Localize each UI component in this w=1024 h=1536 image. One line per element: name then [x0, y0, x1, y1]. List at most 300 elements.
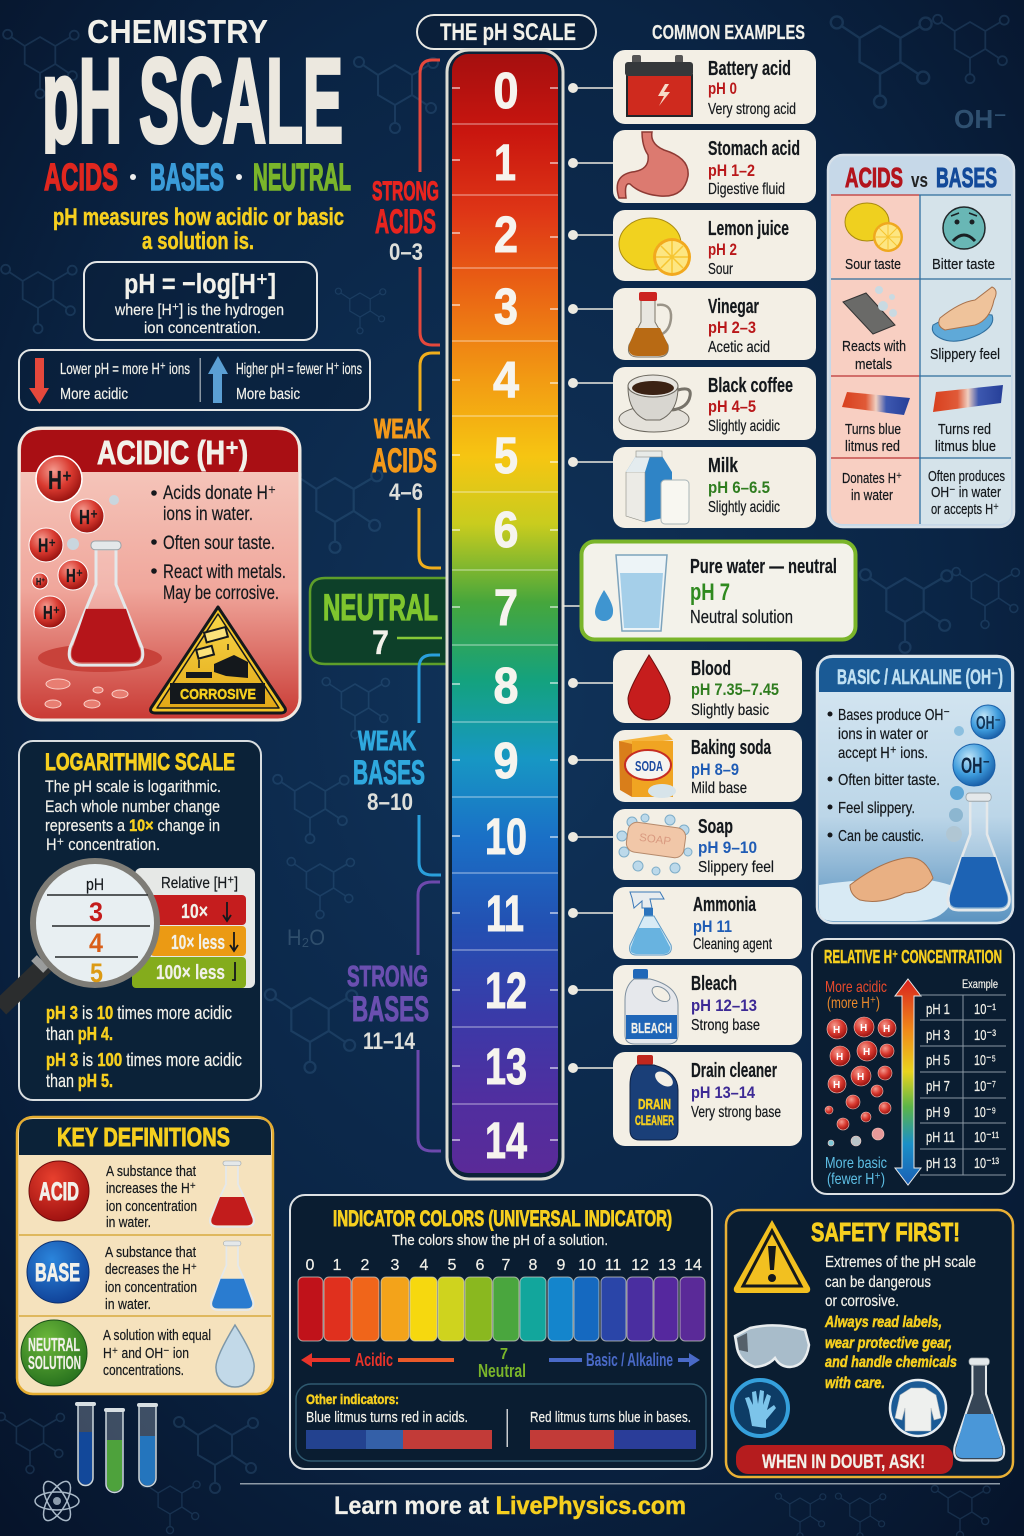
example card: stomach acid: pH 1–2 [708, 161, 755, 180]
log scale description: H⁺ concentration. [46, 835, 160, 854]
panel: indicator colors [290, 1195, 712, 1469]
icon: test tubes [75, 1402, 158, 1492]
scale header pill: THE pH SCALE [440, 19, 576, 46]
example card: battery acid: Very strong acid [708, 101, 796, 118]
label: strong bases: BASES [352, 990, 429, 1029]
band dividers and ticks [452, 88, 558, 1140]
icon: goggles [735, 1325, 809, 1367]
H+ ion bubbles: H⁺ [66, 566, 83, 586]
pH numbers: 9 [494, 732, 518, 789]
arrow: acidic: Acidic [355, 1350, 393, 1370]
arrow: basic alkaline [549, 1350, 700, 1370]
icon: drain cleaner jug: CLEANER [635, 1112, 674, 1128]
icon: hand in foam [850, 858, 933, 901]
heading: acids vs bases [845, 162, 997, 193]
panel: acidic: ACIDIC (H⁺) [97, 434, 248, 471]
definition: acid: increases the H⁺ [106, 1180, 196, 1197]
arrow: up blue [208, 356, 228, 403]
indicator numbers: 4 [420, 1257, 429, 1274]
example card: pure water: pH 7 [690, 579, 730, 606]
label: strong acids: STRONG [372, 176, 439, 206]
icon: battery [625, 55, 693, 116]
text: slippery feel: Slippery feel [930, 346, 1000, 363]
label: neutral 7: Neutral [478, 1361, 526, 1381]
basic bullet points [828, 707, 950, 845]
label: more basic: More basic [825, 1155, 887, 1172]
example card: blood: Blood [691, 658, 731, 680]
faint H2O label: H₂O [287, 925, 325, 950]
concentration table: Example [962, 977, 998, 991]
concentration table: pH 3 [926, 1027, 950, 1044]
bracket: weak acids [419, 353, 441, 568]
definition: base: BASE [35, 1259, 80, 1287]
text: donates H+: in water [851, 487, 893, 504]
panel: acidic [19, 428, 300, 720]
bracket: strong bases [418, 882, 441, 1151]
text: litmus right [935, 421, 996, 455]
panel: safety first [726, 1210, 1013, 1477]
panel: acids vs bases [828, 155, 1014, 527]
lower/higher pH box [19, 350, 370, 410]
icon: base flask [948, 793, 1010, 910]
label: weak acids: 4–6 [389, 479, 423, 506]
definition: acid: ion concentration [106, 1198, 197, 1215]
indicator numbers: 10 [578, 1257, 596, 1274]
example card: lemon juice: Sour [708, 261, 733, 278]
example card: black coffee [613, 367, 816, 440]
log scale comparisons: than pH 4. [46, 1024, 113, 1044]
acidic bullet points: May be corrosive. [163, 583, 279, 604]
example card: pure water: Pure water — neutral [690, 556, 837, 578]
icon: drain cleaner jug [630, 1055, 678, 1140]
icon: soap bar with bubbles: SOAP [638, 832, 672, 848]
heading: acids vs bases: vs [911, 170, 928, 192]
icon: bleach jug [625, 969, 678, 1044]
example card: lemon juice [613, 210, 816, 281]
example card: ammonia: Cleaning agent [693, 936, 772, 953]
icon: sad face [943, 207, 985, 249]
indicator numbers: 1 [333, 1257, 342, 1274]
indicator numbers: 2 [361, 1257, 370, 1274]
concentration table: pH 1 [926, 1001, 950, 1018]
H+ ion bubbles: H⁺ [43, 603, 60, 623]
formula box: pH = −log[H⁺] [124, 268, 276, 299]
example card: drain cleaner: Drain cleaner [691, 1060, 777, 1082]
panel: safety first: SAFETY FIRST! [811, 1217, 960, 1247]
pH numbers: 11 [486, 885, 524, 942]
label: strong bases: 11–14 [363, 1028, 416, 1055]
acidic bullet points: Acids donate H⁺ [163, 483, 276, 504]
example card: vinegar: Vinegar [708, 296, 759, 318]
callout: when in doubt: WHEN IN DOUBT, ASK! [762, 1452, 925, 1473]
label: more acidic: More acidic [825, 979, 887, 996]
example card: pure water: Neutral solution [690, 607, 793, 627]
litmus strip: red to blue [530, 1430, 696, 1449]
safety text: Extremes of the pH scale [825, 1254, 976, 1271]
concentration table [920, 977, 1006, 1175]
icon: coffee cup [619, 375, 690, 432]
definition: acid: A substance that [106, 1163, 197, 1180]
icon: warning triangle [735, 1222, 809, 1292]
acidic bullet points [151, 483, 286, 604]
example card: baking soda [613, 730, 802, 802]
other indicators box: Red litmus turns blue in bases. [530, 1409, 691, 1426]
label: neutral 7: 7 [500, 1346, 508, 1363]
definition: neutral solution: H⁺ and OH⁻ ion [103, 1345, 189, 1362]
label: more basic: (fewer H⁺) [827, 1171, 885, 1188]
log scale description [45, 777, 221, 854]
concentration table: pH 11 [926, 1129, 955, 1146]
pH numbers: 12 [485, 962, 527, 1019]
safety text: can be dangerous [825, 1274, 931, 1291]
log scale description: represents a 10× change in [45, 816, 220, 835]
H+ ion cloud: H [833, 1025, 840, 1036]
lower/higher pH box: Lower pH = more H⁺ ions [60, 361, 190, 378]
formula box [84, 262, 317, 340]
title [44, 20, 342, 154]
text: sour taste: Sour taste [845, 256, 901, 273]
H+ ion cloud: H [857, 1072, 864, 1083]
indicator numbers: 6 [476, 1257, 485, 1274]
OH- ion bubbles: OH⁻ [976, 713, 1001, 733]
basic bullet points: Often bitter taste. [838, 772, 940, 789]
icon: bleach jug: BLEACH [631, 1020, 672, 1037]
concentration table: pH 9 [926, 1104, 950, 1121]
log scale comparisons: pH 3 is 100 times more acidic [46, 1050, 242, 1070]
concentration table: 10⁻¹³ [974, 1155, 999, 1172]
safety text: wear protective gear, [825, 1335, 952, 1352]
indicator numbers [306, 1257, 702, 1274]
indicator numbers: 13 [658, 1257, 676, 1274]
icon: lemon small [845, 203, 903, 252]
example card: pure water [582, 542, 856, 640]
concentration table: 10⁻¹¹ [974, 1129, 999, 1146]
icon: corrosive warning triangle [151, 607, 285, 713]
pH numbers: 8 [494, 657, 518, 714]
H+ ion bubbles [29, 456, 119, 628]
H+ ion bubbles: H⁺ [48, 465, 72, 495]
indicator numbers: 11 [605, 1257, 621, 1274]
concentration table: 10⁻³ [974, 1027, 996, 1044]
indicator numbers: 0 [306, 1257, 315, 1274]
heading: acids vs bases: ACIDS [845, 162, 903, 193]
arrow: down red [29, 358, 49, 404]
litmus strip: blue to red [306, 1430, 492, 1449]
H+ ion cloud: H [883, 1024, 890, 1035]
panel: logarithmic scale [0, 741, 261, 1100]
log scale comparisons: pH 3 is 10 times more acidic [46, 1003, 232, 1023]
label: strong bases [347, 961, 429, 1055]
example card: milk: Slightly acidic [708, 499, 780, 516]
subtitle: acids bases neutral: ACIDS [44, 157, 118, 199]
example card: bleach: Strong base [691, 1017, 760, 1034]
indicator numbers: 5 [448, 1257, 457, 1274]
footer line [240, 1483, 1000, 1484]
other indicators box: Blue litmus turns red in acids. [306, 1409, 468, 1426]
H+ ion cloud: H [863, 1047, 870, 1058]
label: neutral 7 [478, 1346, 526, 1381]
log scale comparisons: than pH 5. [46, 1071, 113, 1091]
lower/higher pH box: More basic [236, 386, 300, 403]
example card: blood: Slightly basic [691, 702, 769, 719]
concentration table: 10⁻⁵ [974, 1052, 996, 1069]
callout: when in doubt [736, 1445, 953, 1474]
label: weak acids: ACIDS [372, 442, 437, 480]
title: pH scale: pH SCALE [42, 34, 343, 168]
definition: neutral solution: A solution with equal [103, 1327, 211, 1344]
example card: battery acid: Battery acid [708, 58, 791, 80]
icon: soap bar with bubbles [617, 814, 692, 875]
title: chemistry: CHEMISTRY [87, 13, 268, 50]
text: litmus left: Turns blue [845, 421, 901, 438]
neutral label box: 7 [372, 624, 389, 662]
icon: corrosive warning triangle: CORROSIVE [180, 686, 256, 703]
bracket: strong acids [420, 60, 440, 345]
common examples heading: COMMON EXAMPLES [652, 22, 805, 44]
icon: spray bottle [630, 892, 671, 955]
label: more basic [825, 1155, 887, 1188]
pH numbers: 10 [485, 808, 527, 865]
example card: ammonia [613, 887, 802, 959]
H+ ion bubbles: H⁺ [36, 577, 45, 588]
scale header pill [417, 15, 596, 49]
example card: drain cleaner: pH 13–14 [691, 1083, 755, 1102]
example card: stomach acid: Stomach acid [708, 138, 800, 160]
neutral label box: NEUTRAL [323, 587, 438, 628]
example card: soap: pH 9–10 [698, 838, 757, 857]
icon: lemon [619, 218, 691, 276]
pH numbers [485, 62, 527, 1169]
pH numbers: 14 [485, 1112, 527, 1169]
example card: vinegar: pH 2–3 [708, 318, 756, 337]
neutral label box [310, 578, 447, 664]
icon: blood drop [628, 655, 670, 720]
pH numbers: 0 [494, 62, 518, 119]
panel: indicator colors: INDICATOR COLORS (UNIVERSAL INDICATOR) [333, 1206, 672, 1231]
definition: base: decreases the H⁺ [105, 1261, 197, 1278]
concentration table: pH 5 [926, 1052, 950, 1069]
text: reacts with metals: metals [855, 356, 892, 373]
text: litmus right: Turns red [938, 421, 991, 438]
indicator numbers: 14 [684, 1257, 702, 1274]
icon: soda box: SODA [635, 758, 663, 775]
panel: key definitions: KEY DEFINITIONS [57, 1122, 230, 1152]
example card: milk: Milk [708, 455, 739, 477]
indicator numbers: 12 [631, 1257, 649, 1274]
pH numbers: 13 [485, 1038, 527, 1095]
text: reacts with metals: Reacts with [842, 338, 906, 355]
definition: neutral solution: NEUTRAL [28, 1335, 80, 1355]
text: produces OH- [928, 468, 1005, 518]
example card: bleach: Bleach [691, 973, 737, 995]
concentration table: pH 7 [926, 1078, 950, 1095]
example card: soap: Slippery feel [698, 859, 774, 876]
panel: basic alkaline [817, 656, 1013, 923]
foam and water [819, 878, 950, 921]
indicator numbers: 3 [391, 1257, 400, 1274]
text: donates H+: Donates H⁺ [842, 470, 902, 487]
icon: stomach [617, 132, 688, 198]
definition: base: ion concentration [105, 1279, 197, 1296]
icon: magnifying glass: 3 [89, 897, 103, 927]
pH numbers: 4 [493, 351, 520, 408]
concentration table: pH 13 [926, 1155, 956, 1172]
arrow: basic alkaline: Basic / Alkaline [586, 1350, 673, 1370]
icon: lab coat [890, 1380, 946, 1436]
icon: acid flask [69, 541, 143, 665]
other indicators box [296, 1384, 706, 1461]
icon: atom [35, 1477, 79, 1525]
relative H+ table: 10× less [171, 932, 225, 954]
text: reacts with metals [842, 338, 906, 373]
acidic bullet points: ions in water. [163, 504, 253, 525]
example card: blood [613, 650, 802, 723]
icon: magnifying glass: 5 [90, 958, 103, 988]
example card: baking soda: pH 8–9 [691, 760, 739, 779]
label: strong acids: 0–3 [389, 239, 423, 266]
log scale comparisons [46, 1003, 242, 1091]
example card: milk [613, 447, 816, 528]
H+ ion cloud [825, 1017, 896, 1146]
definition: base [27, 1241, 254, 1313]
icon: soda box [619, 734, 676, 798]
indicator numbers: 9 [557, 1257, 566, 1274]
text: produces OH-: or accepts H⁺ [931, 501, 999, 518]
faint OH- label: OH⁻ [954, 104, 1007, 134]
icon: glove [732, 1380, 788, 1436]
H+ ion cloud: H [860, 1023, 867, 1034]
text: produces OH-: OH⁻ in water [931, 484, 1001, 501]
label: more acidic: (more H⁺) [827, 995, 880, 1012]
safety text: and handle chemicals [825, 1354, 957, 1371]
example card: black coffee: Black coffee [708, 375, 793, 397]
label: weak bases: 8–10 [367, 789, 413, 816]
definition: neutral solution: SOLUTION [28, 1353, 81, 1373]
relative H+ table [132, 868, 255, 988]
acidic bullet points: Often sour taste. [163, 533, 275, 554]
icon: safety flask [954, 1358, 1004, 1460]
example card: vinegar [613, 288, 816, 360]
definition: base: A substance that [105, 1244, 197, 1261]
text: donates H+ [842, 470, 902, 504]
icon: litmus strip blue to red [842, 392, 910, 415]
pH numbers: 7 [494, 579, 518, 636]
pH numbers: 6 [494, 501, 518, 558]
text: litmus left [845, 421, 901, 455]
arrow: acidic [301, 1350, 454, 1370]
text: litmus right: litmus blue [935, 438, 996, 455]
label: weak bases: WEAK [358, 725, 416, 756]
example card: baking soda: Mild base [691, 780, 747, 797]
label: weak acids: WEAK [374, 413, 430, 444]
definition: acid: in water. [106, 1214, 151, 1231]
safety text: with care. [825, 1375, 885, 1392]
example card: soap: Soap [698, 816, 733, 838]
icon: metal bar with bubbles [843, 286, 897, 334]
safety text: or corrosive. [825, 1293, 899, 1310]
log scale description: Each whole number change [45, 797, 220, 816]
basic bullet points: Bases produce OH⁻ [838, 707, 950, 724]
concentration table: 10⁻⁷ [974, 1078, 996, 1095]
intro sentence [53, 204, 344, 255]
lower/higher pH box: More acidic [60, 386, 128, 403]
spill puddles [38, 644, 162, 708]
icon: magnifying glass [0, 861, 157, 1008]
pH numbers: 2 [494, 206, 518, 263]
H+ ion bubbles: H⁺ [79, 507, 98, 529]
basic bullet points: Feel slippery. [838, 800, 915, 817]
panel: relative H+ concentration [812, 939, 1014, 1194]
icon: water glass and drop [595, 555, 667, 631]
connectors from scale to examples [563, 83, 613, 1073]
definition: neutral solution [21, 1320, 254, 1387]
intro sentence: a solution is. [142, 228, 254, 255]
H+ ion cloud: H [836, 1052, 843, 1063]
lower/higher pH box: Higher pH = fewer H⁺ ions [236, 361, 362, 378]
icon: magnifying glass: pH [86, 875, 104, 894]
example card: drain cleaner [613, 1052, 802, 1146]
panel: key definitions [17, 1117, 273, 1394]
indicator numbers: 8 [529, 1257, 538, 1274]
indicator numbers: 7 [502, 1257, 511, 1274]
label: weak bases: BASES [353, 754, 425, 792]
label: strong bases: STRONG [347, 961, 428, 993]
example card: soap [613, 809, 802, 880]
icon: drain cleaner jug: DRAIN [638, 1096, 671, 1113]
icon: hand on slippery soap [932, 287, 996, 341]
label: strong acids [372, 176, 439, 266]
example card: milk: pH 6–6.5 [708, 478, 770, 497]
safety text: Always read labels, [824, 1314, 942, 1331]
example card: stomach acid: Digestive fluid [708, 181, 785, 198]
icon: litmus strip red to blue [933, 385, 1003, 412]
label: weak bases [353, 725, 425, 816]
pH numbers: 5 [494, 427, 518, 484]
OH- ion bubbles: OH⁻ [961, 753, 990, 778]
subtitle: acids bases neutral: BASES [150, 157, 224, 199]
example card: ammonia: Ammonia [693, 894, 757, 916]
subtitle: acids bases neutral [44, 157, 351, 199]
log scale description: The pH scale is logarithmic. [45, 777, 221, 796]
indicator colour swatches [298, 1277, 705, 1341]
example card: ammonia: pH 11 [693, 917, 732, 936]
formula box: ion concentration. [144, 320, 261, 337]
H+ ion cloud: H [833, 1080, 840, 1091]
label: more acidic [825, 979, 887, 1012]
example card: stomach acid [613, 130, 816, 203]
text: litmus left: litmus red [845, 438, 900, 455]
example card: black coffee: Slightly acidic [708, 418, 780, 435]
definition: neutral solution: concentrations. [103, 1362, 184, 1379]
example card: bleach: pH 12–13 [691, 996, 757, 1015]
basic bullet points: accept H⁺ ions. [838, 745, 928, 762]
concentration table: 10⁻⁹ [974, 1104, 996, 1121]
acidic bullet points: React with metals. [163, 562, 286, 583]
OH- ion bubbles [946, 705, 1005, 842]
relative H+ table: 10× [181, 901, 208, 923]
icon: magnifying glass: 4 [89, 928, 103, 958]
example card: battery acid: pH 0 [708, 79, 737, 98]
example card: battery acid [613, 50, 816, 124]
label: strong acids: ACIDS [375, 203, 436, 241]
relative H+ table: Relative [H⁺] [161, 875, 238, 892]
pH numbers: 1 [494, 134, 516, 191]
example card: vinegar: Acetic acid [708, 339, 770, 356]
definition: base: in water. [105, 1296, 151, 1313]
concentration table: 10⁻¹ [974, 1001, 996, 1018]
example card: lemon juice: Lemon juice [708, 218, 789, 240]
panel: indicator colors: The colors show the pH of a solution. [392, 1232, 608, 1249]
